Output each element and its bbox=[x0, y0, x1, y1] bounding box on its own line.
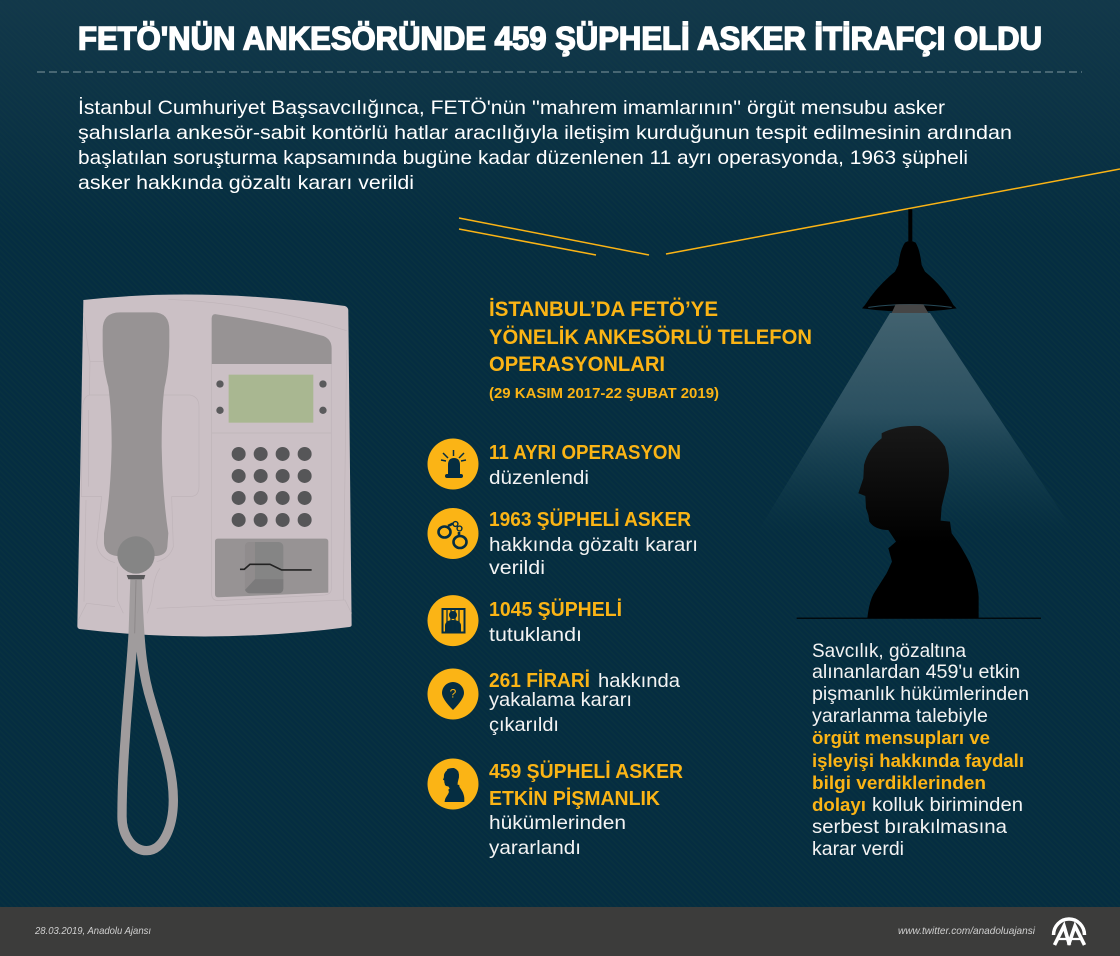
intro paragraph: asker hakkında gözaltı kararı verildi bbox=[78, 172, 414, 194]
stat: 261 fugitives: hakkında bbox=[598, 670, 680, 692]
stat: 11 operations: 11 AYRI OPERASYON bbox=[489, 442, 681, 464]
operations heading bbox=[489, 298, 812, 402]
intro paragraph: İstanbul Cumhuriyet Başsavcılığınca, FETÖ'nün ''mahrem imamlarının'' örgüt mensubu asker bbox=[78, 96, 946, 119]
stat: 459 effective repentance: hükümlerinden bbox=[489, 812, 626, 834]
stat: 459 effective repentance: 459 ŞÜPHELİ ASKER bbox=[489, 760, 684, 783]
logo: Anadolu Agency bbox=[1054, 919, 1084, 945]
illustration: man silhouette bbox=[797, 426, 1041, 619]
display bbox=[229, 375, 313, 423]
prosecutor statement text: kolluk biriminden bbox=[872, 794, 1023, 816]
stat: 1045 arrested: tutuklandı bbox=[489, 624, 582, 646]
prosecutor statement text: pişmanlık hükümlerinden bbox=[812, 683, 1029, 705]
stat: 1963 suspects: 1963 ŞÜPHELİ ASKER bbox=[489, 508, 692, 531]
intro paragraph: başlatılan soruşturma kapsamında bugüne kadar düzenlenen 11 ayrı operasyonda, 1963 şüpheli bbox=[78, 147, 968, 169]
intro paragraph bbox=[78, 96, 1012, 194]
handset ball joint bbox=[117, 536, 155, 579]
operations heading: OPERASYONLARI bbox=[489, 353, 665, 376]
illustration: payphone bbox=[77, 295, 352, 851]
stat: 1963 suspects bbox=[428, 508, 698, 579]
prosecutor statement text: yararlanma talebiyle bbox=[812, 705, 988, 727]
stat: 1963 suspects: hakkında gözaltı kararı bbox=[489, 534, 698, 556]
prosecutor statement text: alınanlardan 459'u etkin bbox=[812, 661, 1020, 683]
title: FETÖ'NÜN ANKESÖRÜNDE 459 ŞÜPHELİ ASKER İTİRAFÇI OLDU bbox=[78, 20, 1042, 56]
decorative yellow wires bbox=[459, 169, 1120, 255]
icon: prisoner behind bars bbox=[428, 595, 478, 646]
icon: handcuffs bbox=[428, 508, 478, 559]
icon: map pin with question mark: ? bbox=[450, 686, 457, 700]
light cone bbox=[757, 313, 1075, 533]
prosecutor statement text: karar verdi bbox=[812, 838, 904, 860]
stat: 1963 suspects: verildi bbox=[489, 557, 545, 579]
prosecutor statement text: işleyişi hakkında faydalı bbox=[812, 750, 1024, 771]
icon: head silhouette bbox=[428, 758, 478, 810]
prosecutor statement text: dolayı bbox=[812, 794, 866, 815]
stat: 459 effective repentance bbox=[428, 758, 684, 859]
intro paragraph: şahıslarla ankesör-sabit kontörlü hatlar aracılığıyla iletişim kurduğunun tespit edilmesinin ardından bbox=[78, 122, 1012, 144]
stat: 261 fugitives: 261 FİRARİ bbox=[489, 669, 590, 692]
speaker panel bbox=[212, 314, 332, 364]
illustration: hanging lamp bbox=[862, 209, 957, 313]
phone body bbox=[77, 295, 352, 636]
stat: 261 fugitives bbox=[428, 668, 680, 736]
prosecutor statement text: örgüt mensupları ve bbox=[812, 727, 990, 748]
stat: 11 operations: düzenlendi bbox=[489, 467, 589, 489]
prosecutor statement text: serbest bırakılmasına bbox=[812, 816, 1007, 838]
operations heading: (29 KASIM 2017-22 ŞUBAT 2019) bbox=[489, 386, 719, 402]
handset bbox=[103, 312, 169, 556]
stat: 261 fugitives: yakalama kararı bbox=[489, 689, 632, 711]
icon: siren bbox=[428, 438, 478, 490]
prosecutor statement text: bilgi verdiklerinden bbox=[812, 772, 986, 793]
prosecutor statement text: Savcılık, gözaltına bbox=[812, 640, 966, 662]
footer bar bbox=[0, 907, 1120, 956]
stat: 459 effective repentance: yararlandı bbox=[489, 837, 581, 859]
operations heading: YÖNELİK ANKESÖRLÜ TELEFON bbox=[489, 326, 812, 349]
operations heading: İSTANBUL’DA FETÖ’YE bbox=[489, 298, 718, 321]
twitter url: www.twitter.com/anadoluajansi bbox=[898, 925, 1036, 937]
screws bbox=[216, 380, 327, 414]
stat: 459 effective repentance: ETKİN PİŞMANLIK bbox=[489, 787, 661, 810]
icon: map pin with question mark bbox=[428, 668, 478, 720]
card slot bbox=[215, 539, 328, 597]
prosecutor statement text bbox=[812, 640, 1029, 860]
keypad bbox=[232, 447, 312, 527]
stat: 261 fugitives: çıkarıldı bbox=[489, 714, 559, 736]
phone cord bbox=[122, 578, 173, 851]
stat: 1045 arrested: 1045 ŞÜPHELİ bbox=[489, 598, 622, 621]
date and source: 28.03.2019, Anadolu Ajansı bbox=[34, 925, 151, 937]
stat: 1045 arrested bbox=[428, 595, 622, 646]
stat: 11 operations bbox=[428, 438, 681, 490]
